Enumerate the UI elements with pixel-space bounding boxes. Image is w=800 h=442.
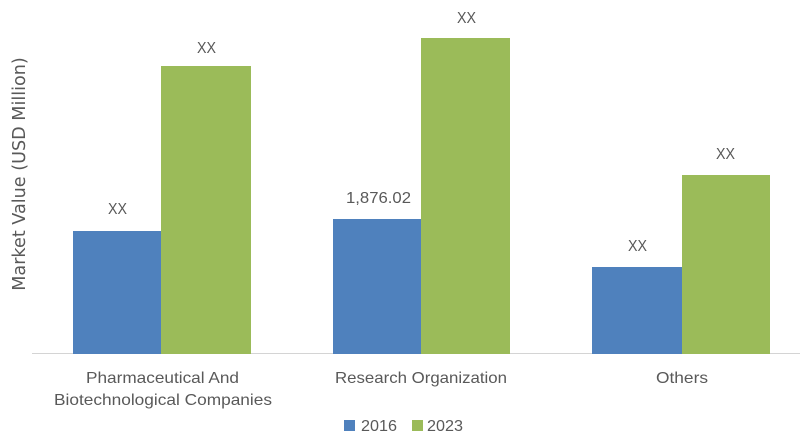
- bars: Pharmaceutical And Biotechnological Companies: XX: [197, 40, 216, 57]
- y-axis title: Market Value (USD Million): [10, 57, 30, 291]
- category labels: Pharmaceutical And: [86, 370, 239, 387]
- bars: Research Organization: XX: [457, 10, 476, 27]
- legend: [344, 418, 463, 435]
- legend: 2016: [361, 418, 397, 435]
- legend: 2023: [427, 418, 463, 435]
- bars: Others: XX: [716, 146, 735, 163]
- bars: Others: XX: [628, 238, 647, 255]
- bars: Others: [592, 146, 770, 354]
- bars: Pharmaceutical And Biotechnological Companies: [73, 40, 251, 354]
- category labels: Research Organization: [335, 370, 507, 387]
- category labels: Others: [656, 370, 708, 387]
- bars: Pharmaceutical And Biotechnological Companies: XX: [108, 201, 127, 218]
- bars: Research Organization: [333, 10, 510, 354]
- category labels: [54, 370, 708, 409]
- category labels: Biotechnological Companies: [54, 392, 272, 409]
- bars: Research Organization: 1,876.02: [346, 190, 411, 207]
